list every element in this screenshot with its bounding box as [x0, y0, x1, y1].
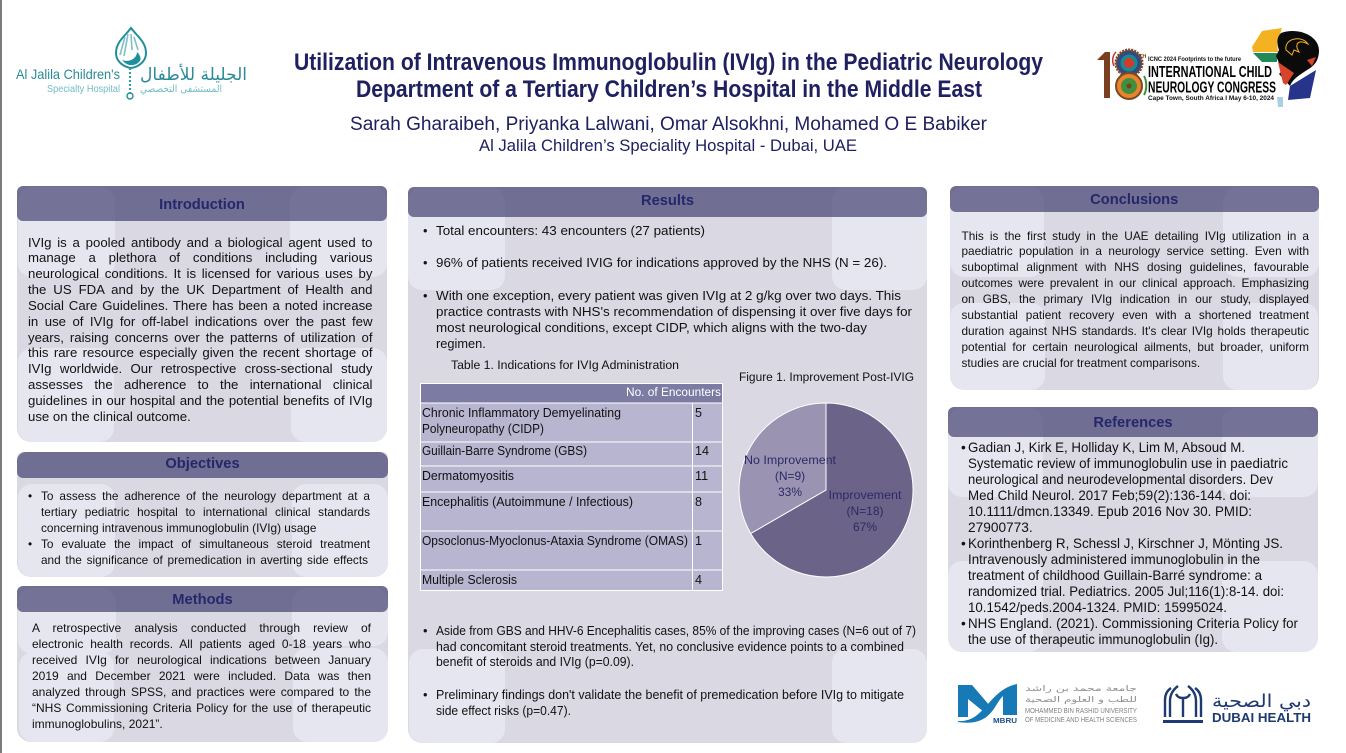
- table: indications for IVIg: Encephalitis (Autoimmune / Infectious): [422, 495, 633, 509]
- table: indications for IVIg: 11: [695, 469, 708, 483]
- text: reference list: Intravenously administered immunoglobulin in the: [968, 552, 1260, 567]
- panel: objectives: •: [28, 489, 32, 503]
- text: key results: •: [423, 255, 427, 270]
- table: indications for IVIg: 5: [695, 406, 702, 420]
- text: key results: With one exception, every patient was given IVIg at 2 g/kg over two days. This: [436, 288, 901, 303]
- text: introduction body: [28, 234, 373, 424]
- logo: Al Jalila Children's Specialty Hospital: Al Jalila Children's: [16, 66, 120, 82]
- table: indications for IVIg: Dermatomyositis: [422, 469, 514, 483]
- text: conclusions body: studies are crucial for treatment comparisons.: [962, 356, 1200, 370]
- table: indications for IVIg: No. of Encounters: [626, 385, 721, 399]
- panel: results: [408, 187, 927, 743]
- icon: Dubai Health arches: [1163, 686, 1203, 722]
- heading: table 1: Table 1. Indications for IVIg Administration: [451, 358, 679, 372]
- text: reference list: •: [961, 536, 966, 551]
- text: conclusions body: [962, 228, 1309, 370]
- text: further results: Aside from GBS and HHV-6 Encephalitis cases, 85% of the improving cases (N=6 out of 7): [436, 623, 916, 638]
- text: reference list: neurological and neurodevelopmental disorders. Dev: [968, 472, 1273, 487]
- panel: objectives: [17, 452, 388, 577]
- text: objectives list: concerning intravenous immunoglobulin (IVIg) usage: [41, 521, 316, 535]
- text: introduction body: assesses the adherence to the international clinical: [28, 377, 372, 392]
- text: conclusions body: on GBS, the primary IVIg indication in our study, displayed: [962, 292, 1309, 306]
- table: indications for IVIg: 8: [695, 495, 702, 509]
- heading: methods: Methods: [172, 592, 233, 608]
- heading: figure 1: Figure 1. Improvement Post-IVIG: [739, 370, 914, 384]
- text: introduction body: manage a plethora of conditions including various: [28, 250, 372, 265]
- text: reference list: Gadian J, Kirk E, Holliday K, Lim M, Absoud M.: [968, 440, 1245, 455]
- heading: references: [948, 407, 1318, 437]
- text: introduction body: years, raising concerns over the patterns of utilization of: [28, 330, 372, 345]
- text: methods body: “NHS Commissioning Criteria Policy for the use of therapeutic: [32, 700, 371, 714]
- pie chart: improvement post-IVIG: (N=9): [775, 469, 805, 483]
- text: key results: •: [423, 223, 427, 238]
- text: reference list: Korinthenberg R, Schessl J, Kirschner J, Mönting JS.: [968, 536, 1283, 551]
- text: reference list: NHS England. (2021). Commissioning Criteria Policy for: [968, 616, 1298, 631]
- icon: number 18: TH: [1139, 54, 1146, 60]
- text: introduction body: neurological conditions. It is licensed for various uses by: [28, 266, 372, 281]
- text: further results: •: [423, 623, 427, 638]
- heading: objectives: [17, 452, 388, 478]
- table: indications for IVIg: Guillain-Barre Syndrome (GBS): [422, 444, 587, 458]
- text: further results: Preliminary findings don't validate the benefit of premedication before IVIg to mitigate: [436, 687, 904, 702]
- text: introduction body: guidelines in our hospital and the potential benefits of IVIg: [28, 393, 372, 408]
- logo: Al Jalila Children's Specialty Hospital: الجليلة للأطفال: [140, 64, 247, 85]
- table: indications for IVIg: [420, 384, 723, 591]
- pie chart: improvement post-IVIG: [739, 403, 913, 577]
- text: introduction body: IVIg is a pooled antibody and a biological agent used to: [28, 234, 372, 250]
- text: introduction body: use on the clinical outcome.: [28, 409, 191, 424]
- heading: results: [408, 187, 927, 217]
- heading: conclusions: Conclusions: [1090, 192, 1178, 208]
- text: key results: regimen.: [436, 336, 486, 351]
- text: reference list: 27900773.: [968, 520, 1033, 535]
- text: reference list: the use of therapeutic immunoglobulin (Ig).: [968, 632, 1218, 647]
- text: reference list: 10.1542/peds.2004-1324. PMID: 15995024.: [968, 600, 1227, 615]
- text: introduction body: the US FDA and by the UK Department of Health and: [28, 282, 372, 297]
- text: key results: •: [423, 288, 427, 303]
- logo: MBRU: جامعة محمد بن راشد: [1025, 684, 1137, 693]
- text: conclusions body: duration against NHS standards. It's clear IVIg holds therapeutic: [962, 324, 1309, 338]
- table: indications for IVIg: Multiple Sclerosis: [422, 573, 517, 587]
- table: indications for IVIg: Opsoclonus-Myoclonus-Ataxia Syndrome (OMAS): [422, 534, 688, 548]
- text: conclusions body: suboptimal alignment with NHS dosing guidelines, favourable: [962, 260, 1309, 274]
- heading: methods: [17, 586, 388, 612]
- logo: MBRU: للطب و العلوم الصحية: [1025, 695, 1137, 704]
- text: conclusions body: outcomes were prevalent in our clinical approach. Emphasizing: [962, 276, 1309, 290]
- text: methods body: 2019 and December 2021 were included. Data was then: [32, 668, 371, 682]
- text: conclusions body: potential for certain neurological ailments, but broader, uniform: [962, 340, 1309, 354]
- icon: MBRU mark: [958, 684, 1017, 725]
- panel: references: [948, 407, 1318, 652]
- logo: MBRU: [958, 684, 1137, 725]
- text: key results: most neurological conditions, except CIDP, which aligns with the two-day: [436, 320, 868, 335]
- icon: MBRU mark: MBRU: [993, 718, 1017, 725]
- table: indications for IVIg: 4: [695, 573, 702, 587]
- text: further results: [423, 623, 916, 718]
- congress name: [1148, 56, 1276, 102]
- text: conclusions body: substantial patient recovery even with a shortened treatment: [962, 308, 1309, 322]
- text: key results: 96% of patients received IVIG for indications approved by the NHS (N = 26).: [436, 255, 887, 270]
- text: methods body: received IVIg for neurological indications between January: [32, 652, 371, 666]
- text: key results: practice contrasts with NHS's recommendation of dispensing it over five days for: [436, 304, 913, 319]
- text: reference list: [961, 440, 1298, 647]
- pie chart: improvement post-IVIG: No Improvement: [744, 453, 837, 467]
- text: conclusions body: This is the first study in the UAE detailing IVIg utilization in a: [962, 228, 1309, 242]
- title: [294, 49, 1044, 155]
- congress name: NEUROLOGY CONGRESS: [1148, 80, 1276, 96]
- logo: International Child Neurology Congress: [1097, 28, 1319, 107]
- text: reference list: •: [961, 616, 966, 631]
- logo: Dubai Health: DUBAI HEALTH: [1212, 710, 1311, 725]
- text: introduction body: in use of IVIg for off-label indications over the past few: [28, 314, 372, 329]
- table: indications for IVIg: Chronic Inflammatory Demyelinating: [422, 406, 621, 420]
- heading: references: References: [1093, 415, 1173, 431]
- icon: Africa and child silhouette: [1252, 28, 1319, 107]
- text: reference list: Med Child Neurol. 2017 Feb;59(2):136-144. doi:: [968, 488, 1251, 503]
- logo: Dubai Health: دبي الصحية: [1212, 691, 1311, 712]
- text: reference list: Systematic review of immunoglobulin use in paediatric: [968, 456, 1288, 471]
- panel: introduction: [17, 186, 387, 442]
- text: introduction body: IVIg worldwide. Our retrospective cross-sectional study: [28, 361, 372, 376]
- pie chart: improvement post-IVIG: (N=18): [846, 504, 884, 518]
- text: further results: benefit of steroids and IVIg (p=0.09).: [436, 654, 634, 669]
- icon: teardrop emblem: [116, 28, 146, 99]
- text: methods body: analyzed through SPSS, and practices were compared to the: [32, 684, 371, 698]
- logo: MBRU: MOHAMMED BIN RASHID UNIVERSITY: [1025, 708, 1137, 715]
- pie chart: improvement post-IVIG: Improvement: [828, 488, 902, 502]
- pie chart: improvement post-IVIG: 33%: [778, 485, 802, 499]
- text: objectives list: To assess the adherence of the neurology department at a: [41, 489, 370, 503]
- congress name: Cape Town, South Africa I May 6-10, 2024: [1148, 95, 1274, 102]
- congress name: ICNC 2024 Footprints to the future: [1148, 56, 1241, 63]
- heading: introduction: Introduction: [159, 197, 245, 213]
- text: further results: side effect risks (p=0.47).: [436, 703, 571, 718]
- table: indications for IVIg: Polyneuropathy (CIDP): [422, 422, 544, 436]
- text: reference list: 10.1111/dmcn.13349. Epub 2016 Nov 30. PMID:: [968, 504, 1252, 519]
- text: reference list: treatment of childhood Guillain-Barré syndrome: a: [968, 568, 1262, 583]
- affiliation: Al Jalila Children’s Speciality Hospital - Dubai, UAE: [479, 136, 857, 155]
- logo: MBRU: OF MEDICINE AND HEALTH SCIENCES: [1025, 717, 1137, 724]
- title: Utilization of Intravenous Immunoglobulin (IVIg) in the Pediatric Neurology: [294, 49, 1044, 76]
- text: methods body: A retrospective analysis conducted through review of: [32, 620, 371, 634]
- pie chart: improvement post-IVIG: 67%: [853, 520, 877, 534]
- panel: objectives: •: [28, 537, 32, 551]
- text: objectives list: To evaluate the impact of simultaneous steroid treatment: [41, 537, 370, 551]
- heading: objectives: Objectives: [165, 456, 240, 472]
- text: methods body: electronic health records. All patients aged 0-18 years who: [32, 636, 371, 650]
- text: key results: [423, 223, 913, 351]
- panel: methods: [17, 586, 388, 742]
- text: objectives list: [28, 489, 370, 567]
- text: methods body: immunoglobulins, 2021”.: [32, 716, 163, 730]
- icon: number 18: [1097, 50, 1146, 99]
- text: further results: had concomitant steroid treatments. Yet, no conclusive evidence points to a combined: [436, 639, 904, 654]
- congress name: INTERNATIONAL CHILD: [1148, 64, 1272, 81]
- logo: Al Jalila Children's Specialty Hospital: المستشفى التخصصي: [140, 84, 222, 95]
- table: indications for IVIg: 14: [695, 444, 709, 458]
- table: indications for IVIg: 1: [695, 534, 702, 548]
- panel: conclusions: [950, 186, 1319, 390]
- text: conclusions body: paediatric population in a neurology service setting. Even with: [962, 244, 1309, 258]
- text: objectives list: and the significance of premedication in averting side effects: [41, 553, 368, 567]
- heading: results: Results: [641, 193, 694, 209]
- text: key results: Total encounters: 43 encounters (27 patients): [436, 223, 705, 238]
- text: methods body: [32, 620, 371, 730]
- heading: conclusions: [950, 186, 1319, 212]
- text: reference list: •: [961, 440, 966, 455]
- text: reference list: randomized trial. Pediatrics. 2005 Jul;116(1):8-14. doi:: [968, 584, 1284, 599]
- text: introduction body: Social Care Guidelines. There has been a noted increase: [28, 298, 372, 313]
- authors: Sarah Gharaibeh, Priyanka Lalwani, Omar Alsokhni, Mohamed O E Babiker: [350, 114, 988, 135]
- text: further results: •: [423, 687, 427, 702]
- text: objectives list: tertiary pediatric hospital to international clinical standards: [41, 505, 370, 519]
- logo: Dubai Health: [1163, 685, 1311, 725]
- heading: introduction: [17, 186, 387, 221]
- left page edge: [0, 0, 2, 753]
- logo: Al Jalila Children's Specialty Hospital: Specialty Hospital: [47, 84, 120, 95]
- title: Department of a Tertiary Children’s Hospital in the Middle East: [356, 76, 982, 103]
- logo: Al Jalila Children's Specialty Hospital: [16, 26, 247, 100]
- text: introduction body: this rare resource especially given the recent shortage of: [28, 345, 372, 360]
